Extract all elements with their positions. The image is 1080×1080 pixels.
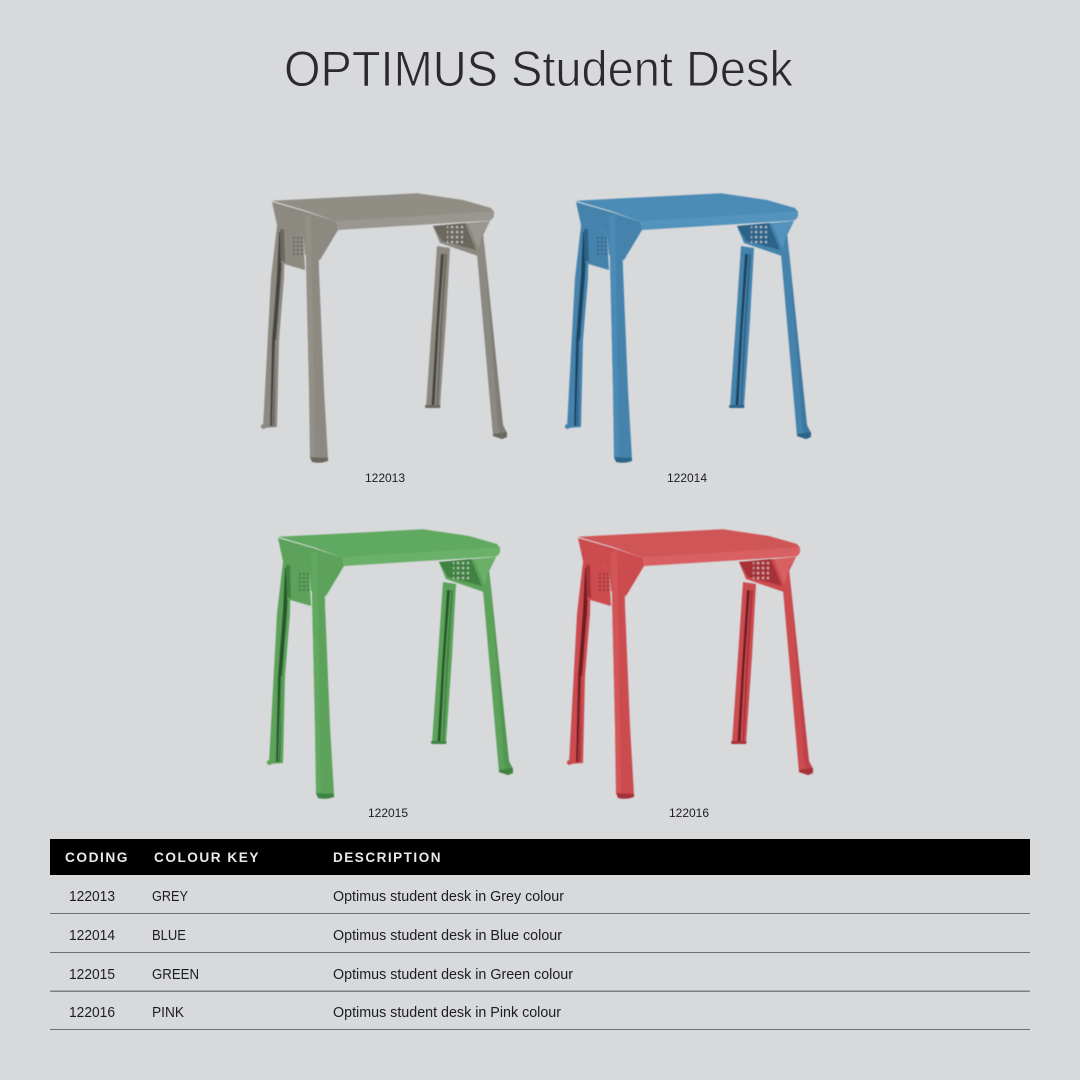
product: grey desk [261, 193, 507, 463]
table header: DESCRIPTION [333, 850, 442, 865]
row: 122016: 122016 [69, 1005, 115, 1021]
table header: CODING [65, 850, 129, 865]
row: 122015 [50, 967, 1030, 992]
caption: 122016: 122016 [669, 808, 709, 820]
row: 122013: Optimus student desk in Grey colour [333, 889, 564, 905]
row: 122014: BLUE [152, 928, 186, 944]
caption: 122013: 122013 [365, 473, 405, 485]
row: 122013: 122013 [69, 889, 115, 905]
caption: 122015: 122015 [368, 808, 408, 820]
product: blue desk [565, 193, 811, 463]
row: 122015: 122015 [69, 967, 115, 983]
row: 122014 [50, 928, 1030, 953]
caption: 122014: 122014 [667, 473, 708, 485]
product: green desk [267, 529, 513, 799]
row: 122014: Optimus student desk in Blue colour [333, 928, 562, 944]
table header: COLOUR KEY [154, 850, 260, 865]
row: 122016: PINK [152, 1005, 184, 1021]
row: 122016: Optimus student desk in Pink colour [333, 1005, 561, 1021]
title: OPTIMUS Student Desk [284, 41, 794, 97]
row: 122016 [50, 1005, 1030, 1030]
row: 122014: 122014 [69, 928, 115, 944]
table [50, 839, 1030, 1030]
table header [50, 839, 1030, 875]
row: 122015: GREEN [152, 967, 199, 983]
product: pink desk [567, 529, 813, 799]
row: 122015: Optimus student desk in Green colour [333, 967, 573, 983]
row: 122013 [50, 889, 1030, 914]
row: 122013: GREY [152, 889, 188, 905]
